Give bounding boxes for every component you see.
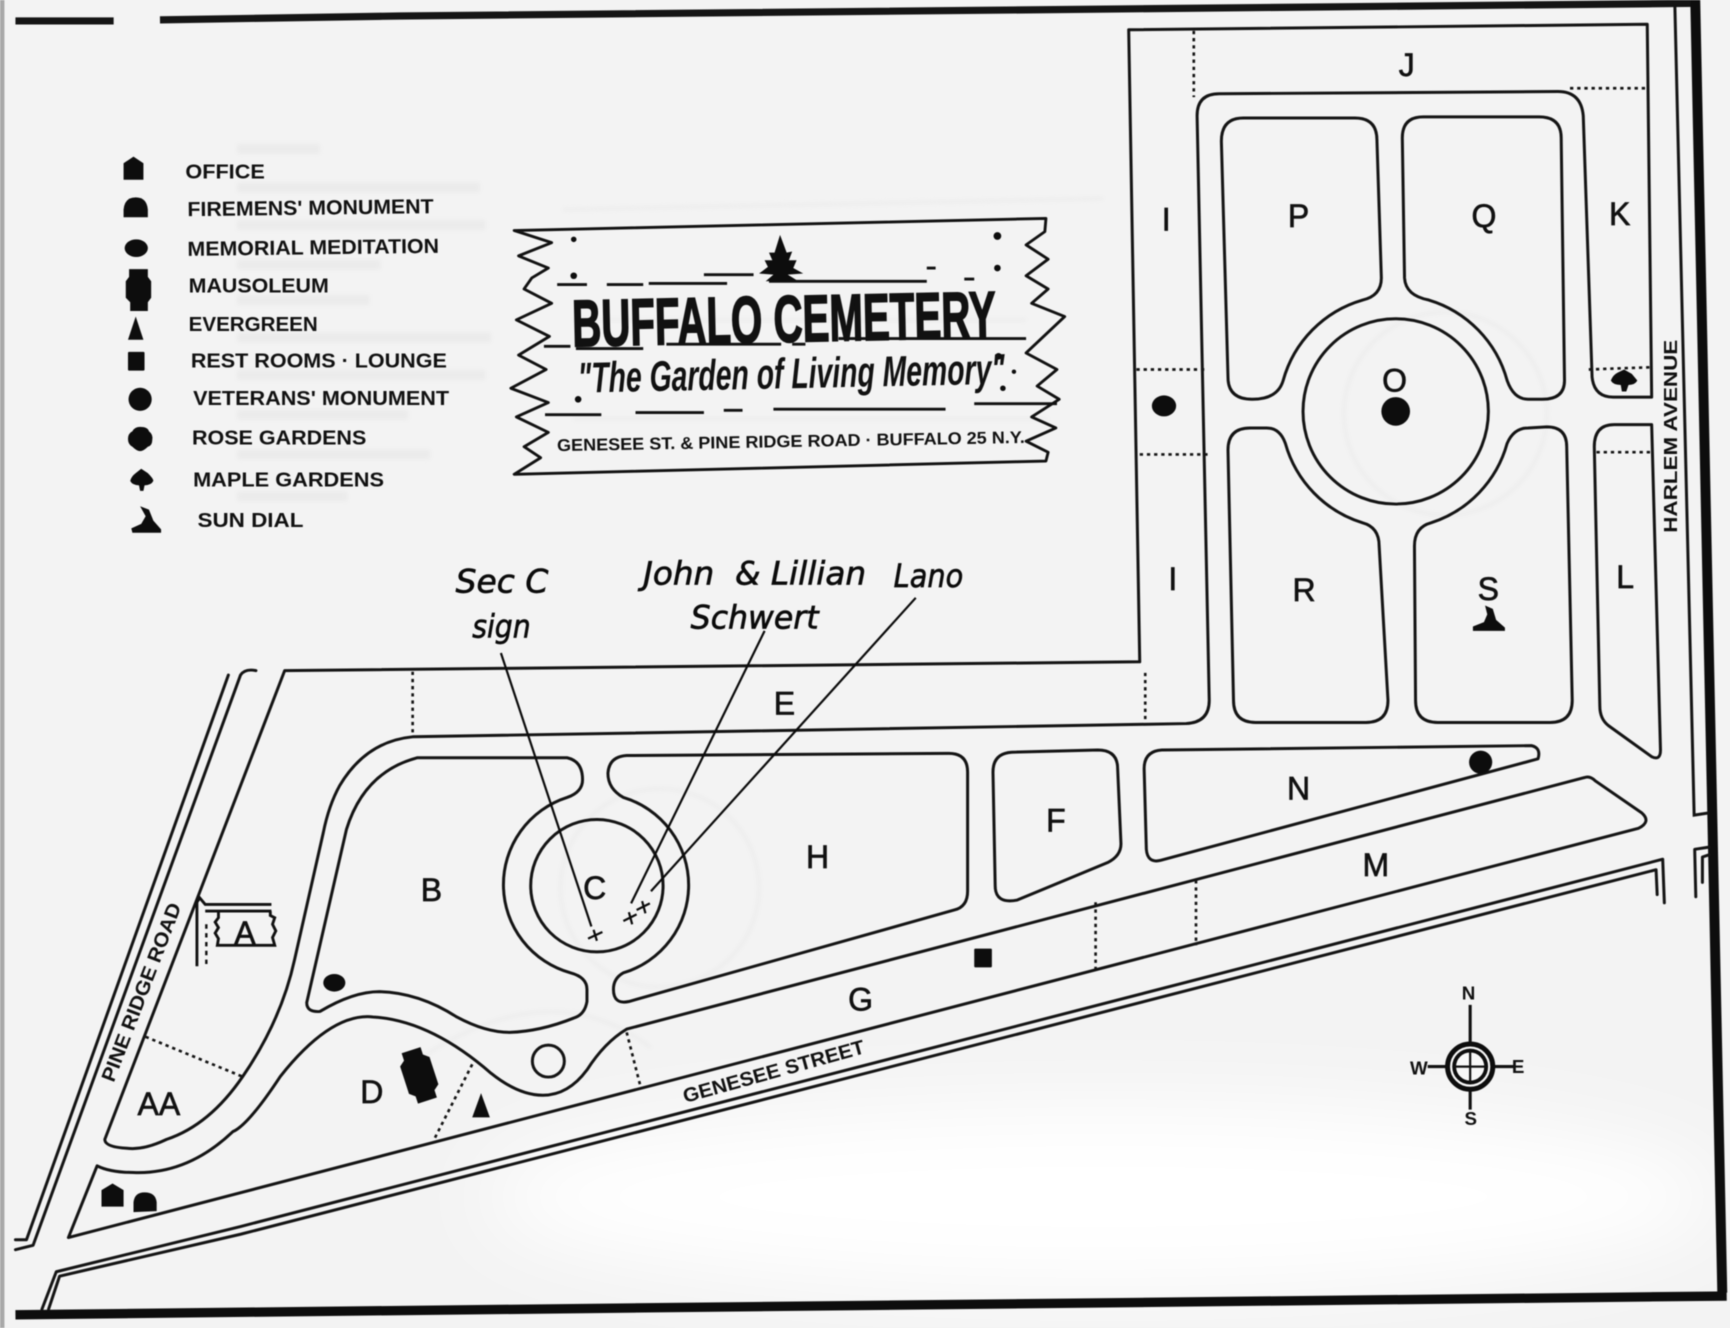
title sign — [511, 218, 1065, 474]
section Q — [1402, 117, 1565, 399]
annotation: Sec C sign — [456, 562, 602, 941]
section H — [608, 753, 968, 1002]
legend: rose gardens: ROSE GARDENS — [192, 428, 366, 450]
map symbols — [102, 370, 1637, 1212]
icon: pine tree — [759, 235, 803, 281]
annotation: Lano — [637, 557, 963, 913]
icon: monument marker N — [1469, 751, 1492, 774]
legend: memorial meditation: MEMORIAL MEDITATION — [187, 236, 439, 261]
section letters: AA — [138, 1086, 181, 1122]
section letters: D — [360, 1074, 383, 1110]
section N — [1144, 746, 1539, 861]
small circle — [532, 1045, 564, 1077]
Genesee Street edges — [42, 847, 1709, 1309]
legend: office: OFFICE — [185, 162, 265, 184]
legend: sun dial — [131, 506, 303, 533]
legend — [124, 157, 450, 533]
road label: Genesee Street: GENESEE STREET — [681, 1037, 867, 1108]
section divider dotted lines — [146, 31, 1652, 1138]
strip G and M top and D boundary — [68, 777, 1646, 1238]
section O circle — [1303, 319, 1488, 504]
annotation: John and Lillian Schwert: Schwert — [691, 599, 820, 637]
legend: evergreen: EVERGREEN — [189, 314, 318, 336]
icon: evergreen — [472, 1093, 490, 1117]
section S — [1414, 427, 1572, 722]
section L — [1594, 425, 1660, 758]
section letters: F — [1046, 803, 1066, 839]
section letters: K — [1609, 196, 1630, 232]
compass rose — [1410, 982, 1524, 1129]
section letters: O — [1382, 363, 1407, 399]
section letters: L — [1616, 559, 1634, 595]
icon: sun dial marker — [1473, 606, 1505, 631]
section letters: Q — [1472, 198, 1496, 234]
annotation: John and Lillian Schwert — [623, 555, 866, 924]
section letters: P — [1288, 198, 1309, 234]
legend: firemens monument: FIREMENS' MONUMENT — [187, 196, 434, 221]
section letters: I — [1162, 202, 1171, 238]
compass rose: S — [1464, 1108, 1477, 1129]
section P — [1221, 118, 1381, 399]
section letters: C — [583, 870, 606, 906]
section letters: M — [1363, 847, 1389, 883]
section letters: J — [1399, 47, 1415, 83]
legend: maple gardens — [130, 469, 384, 491]
sign tagline: "The Garden of Living Memory" — [577, 346, 1006, 403]
section letters: N — [1287, 771, 1310, 807]
section letters — [138, 47, 1634, 1122]
icon: meditation marker — [323, 974, 345, 992]
legend: mausoleum: MAUSOLEUM — [189, 275, 329, 297]
section C circle — [531, 820, 663, 952]
sign address: GENESEE ST. & PINE RIDGE ROAD · BUFFALO 25 N.Y. — [557, 428, 1025, 455]
legend: evergreen — [128, 314, 318, 340]
section letters: S — [1478, 571, 1499, 607]
section letters: R — [1293, 572, 1316, 608]
icon: rest rooms marker — [974, 949, 992, 967]
legend: rest rooms lounge: REST ROOMS · LOUNGE — [191, 350, 447, 372]
compass rose: N — [1462, 982, 1475, 1003]
section letters: G — [848, 981, 873, 1017]
legend: sun dial: SUN DIAL — [197, 510, 303, 532]
sign title: BUFFALO CEMETERY — [571, 278, 997, 361]
compass rose: W — [1410, 1057, 1428, 1078]
road label: Pine Ridge Road: PINE RIDGE ROAD — [98, 900, 186, 1085]
section F — [993, 750, 1121, 901]
icon: mausoleum — [396, 1045, 442, 1105]
section letters: I — [1168, 561, 1177, 597]
sign outline — [511, 218, 1065, 474]
section B — [307, 758, 587, 1032]
section letters: B — [421, 872, 442, 908]
annotation: Sec C sign: Sec C — [456, 562, 549, 600]
icon: office — [102, 1184, 124, 1207]
icon: maple gardens marker — [1611, 370, 1637, 392]
icon: rose gardens marker — [1152, 395, 1176, 416]
annotation: Lano: Lano — [894, 557, 963, 595]
icon: veterans monument marker — [1381, 397, 1410, 426]
road label: Harlem Avenue: HARLEM AVENUE — [1660, 340, 1681, 533]
legend: veterans monument: VETERANS' MONUMENT — [193, 388, 450, 410]
annotation: Sec C sign: sign — [472, 608, 531, 646]
legend: maple gardens: MAPLE GARDENS — [193, 469, 384, 491]
section A sign — [197, 898, 276, 966]
section A sign: A — [234, 915, 256, 951]
legend: rose gardens — [128, 427, 366, 451]
icon: firemens monument — [134, 1192, 157, 1212]
sign plank lines and rivets — [544, 232, 1057, 415]
Pine Ridge Road edges — [15, 670, 256, 1250]
east section outer road and E strip — [105, 24, 1652, 1149]
section R — [1228, 428, 1388, 722]
annotation: John and Lillian Schwert: John & Lillian — [637, 555, 866, 593]
section letters: H — [806, 839, 829, 875]
compass rose: E — [1512, 1056, 1524, 1077]
section letters: E — [774, 686, 795, 722]
legend: office — [124, 157, 265, 184]
legend: mausoleum — [126, 269, 329, 311]
